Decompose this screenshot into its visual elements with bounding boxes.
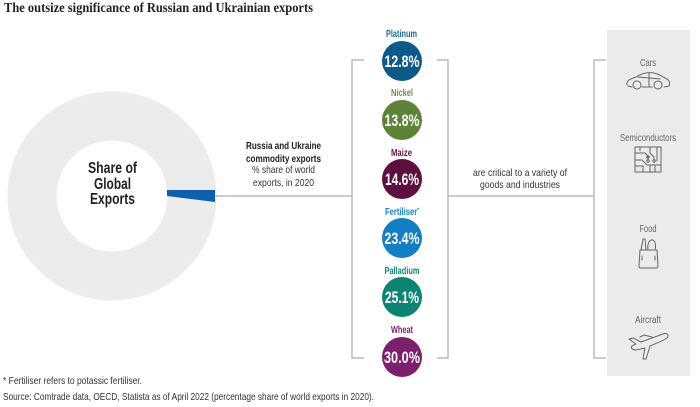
- commodity: palladium: [382, 266, 422, 317]
- text: are critical to a variety of goods and industries: are critical to a variety of: [473, 167, 567, 179]
- commodity: maize: 14.6%: [385, 171, 419, 189]
- panel: industries: [607, 30, 690, 376]
- commodity: maize: Maize: [391, 148, 412, 159]
- text: Russia and Ukraine commodity exports: [246, 140, 321, 189]
- commodity: wheat: 30.0%: [384, 349, 420, 367]
- industry: aircraft: [629, 314, 668, 359]
- industry: food: [639, 223, 658, 268]
- connector line: bracket to industries: [448, 195, 594, 197]
- industry: aircraft: Aircraft: [635, 314, 661, 326]
- commodity: platinum: Platinum: [386, 29, 417, 40]
- icon: airplane: [629, 333, 668, 359]
- source: Source: Comtrade data, OECD, Statista as of April 2022 (percentage share of world exports in 2020).: [3, 391, 374, 403]
- left bracket: [352, 60, 364, 358]
- icon: circuit board: [635, 147, 661, 172]
- text: are critical to a variety of goods and industries: goods and industries: [480, 179, 560, 191]
- donut centre label: Exports: [90, 191, 135, 208]
- commodity: wheat: [382, 325, 422, 377]
- commodity: fertiliser: Fertiliser: [385, 207, 427, 218]
- commodity: wheat: Wheat: [391, 325, 413, 336]
- commodity: maize: [382, 148, 422, 199]
- industry: semiconductors: [620, 132, 676, 172]
- donut centre label: Share of: [88, 160, 138, 177]
- text: Russia and Ukraine commodity exports: % share of world: [252, 164, 315, 176]
- right bracket: [437, 60, 448, 358]
- text: Russia and Ukraine commodity exports: exports, in 2020: [253, 177, 314, 189]
- text: Russia and Ukraine commodity exports: commodity exports: [246, 153, 321, 165]
- connector line: donut to bracket: [215, 195, 352, 197]
- industry: semiconductors: Semiconductors: [620, 132, 676, 144]
- text: are critical to a variety of goods and industries: [473, 167, 567, 191]
- industry: cars: Cars: [640, 57, 656, 69]
- commodity: fertiliser: [382, 207, 422, 258]
- icon: grocery bag: [639, 239, 658, 268]
- commodity: palladium: Palladium: [384, 266, 420, 277]
- commodity: nickel: Nickel: [391, 88, 413, 99]
- commodity: fertiliser: *: [417, 208, 420, 214]
- industries bracket: [594, 60, 606, 358]
- donut highlighted wedge: [167, 190, 215, 202]
- industry: cars: [627, 57, 670, 89]
- donut centre label: Global: [94, 176, 131, 193]
- title: The outsize significance of Russian and Ukrainian exports: [4, 0, 313, 15]
- commodity: palladium: 25.1%: [385, 289, 419, 307]
- text: Russia and Ukraine commodity exports: Russia and Ukraine: [246, 140, 321, 152]
- donut chart: share of global exports: [32, 116, 215, 276]
- footnote: * Fertiliser refers to potassic fertiliser.: [3, 375, 142, 387]
- industry: food: Food: [640, 223, 657, 235]
- commodity: platinum: [382, 29, 422, 81]
- commodity: nickel: 13.8%: [384, 112, 420, 130]
- icon: car: [627, 73, 670, 89]
- commodity: nickel: [382, 88, 422, 140]
- commodity: platinum: 12.8%: [384, 53, 420, 71]
- donut centre label: [88, 160, 138, 208]
- commodity: fertiliser: 23.4%: [384, 230, 420, 248]
